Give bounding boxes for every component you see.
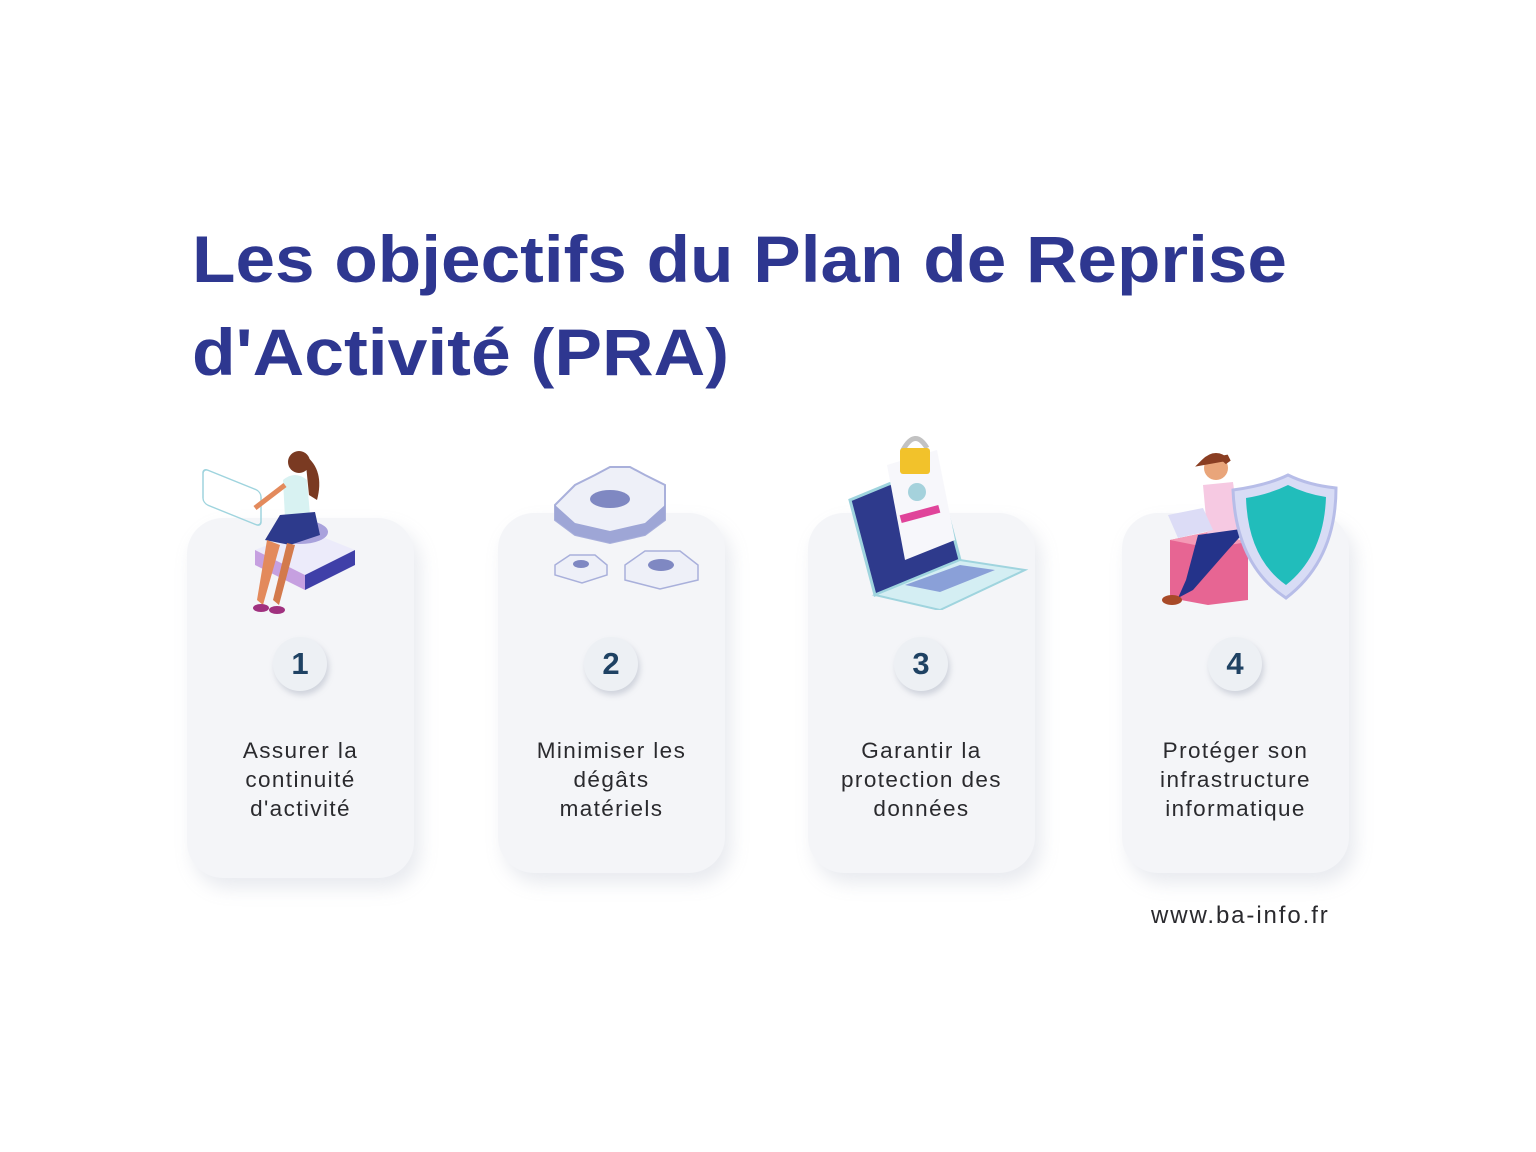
text 4: Protéger son [1163, 738, 1308, 763]
icon: laptop with lock [848, 436, 1028, 610]
text 1: continuité [245, 767, 356, 792]
text 4 [1160, 738, 1311, 821]
icon: woman seated with screen [202, 451, 355, 614]
text 1: d'activité [250, 796, 351, 821]
number 4 [1208, 637, 1262, 691]
text 2: dégâts [574, 767, 649, 792]
card 2 [498, 513, 725, 873]
number 1 [273, 637, 327, 691]
text 2: Minimiser les [537, 738, 686, 763]
number 3: 3 [912, 646, 930, 681]
text 3: données [873, 796, 970, 821]
title [192, 222, 1287, 389]
card 4 [1122, 513, 1349, 873]
card 1 [187, 518, 414, 878]
number 2: 2 [602, 646, 620, 681]
number 1: 1 [291, 646, 309, 681]
icon: gears [554, 466, 699, 590]
text 3: protection des [841, 767, 1002, 792]
title: Les objectifs du Plan de Reprise [192, 222, 1287, 296]
text 2: matériels [560, 796, 663, 821]
text 3: Garantir la [861, 738, 982, 763]
title: d'Activité (PRA) [192, 315, 729, 389]
icon: man with shield [1162, 453, 1338, 605]
text 2 [537, 738, 686, 821]
text 4: infrastructure [1160, 767, 1311, 792]
text 1: Assurer la [243, 738, 358, 763]
number 2 [584, 637, 638, 691]
text 1 [243, 738, 358, 821]
text 3 [841, 738, 1002, 821]
card 3 [808, 513, 1035, 873]
number 4: 4 [1226, 646, 1244, 681]
number 3 [894, 637, 948, 691]
website footer: www.ba-info.fr [1151, 902, 1330, 929]
text 4: informatique [1165, 796, 1306, 821]
